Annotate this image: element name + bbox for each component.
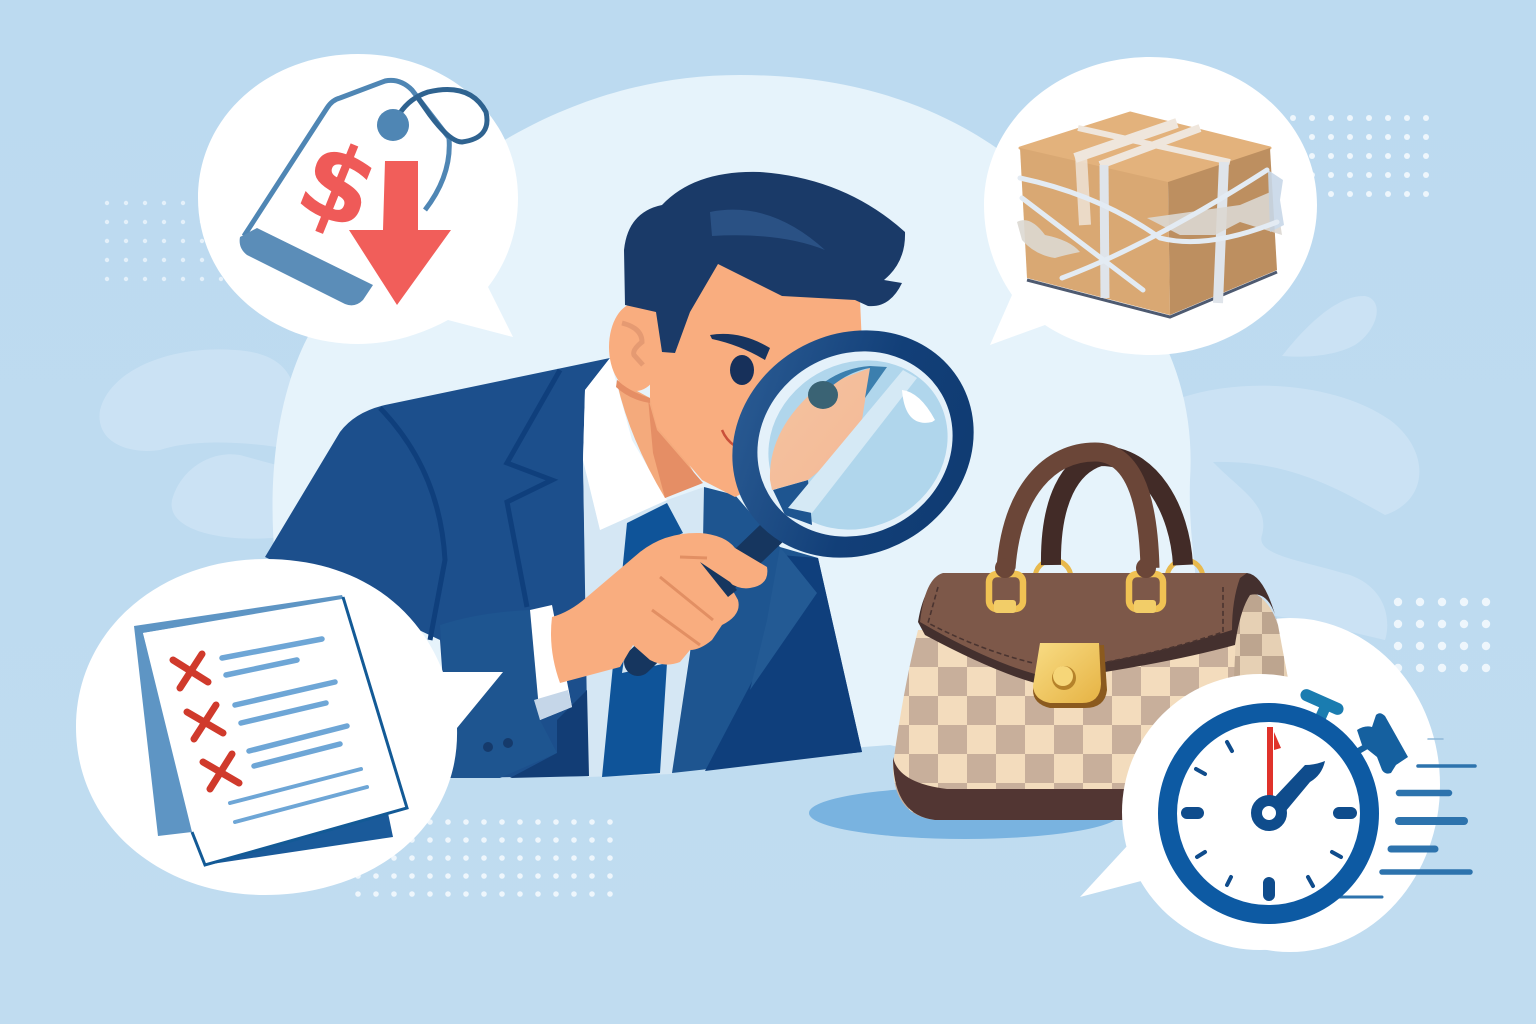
hair highlight — [710, 210, 825, 250]
collar — [583, 358, 667, 530]
flap — [920, 573, 1247, 674]
side button — [1357, 713, 1408, 774]
tag hole — [377, 109, 409, 141]
hand — [551, 533, 767, 683]
back sheet — [134, 595, 344, 836]
wrap strings — [1020, 170, 1277, 290]
body — [893, 623, 1295, 820]
handbag shadow — [809, 787, 1121, 839]
smile — [722, 430, 735, 446]
sleeve — [440, 610, 557, 778]
bubble tail — [1080, 845, 1190, 897]
box top — [1020, 113, 1270, 182]
side panel — [1232, 592, 1292, 720]
dot grids — [97, 108, 1497, 903]
bubble — [76, 559, 503, 895]
box right face — [1168, 148, 1277, 315]
jacket right side — [672, 487, 862, 773]
bubble — [984, 57, 1317, 355]
ear — [609, 303, 663, 391]
back rings — [1035, 560, 1203, 596]
shirt — [583, 460, 704, 777]
man in suit — [76, 54, 1475, 952]
background blobs: soft clouds — [99, 296, 1419, 640]
neck — [617, 380, 700, 498]
bottom sheet — [205, 813, 393, 865]
rivets — [995, 558, 1156, 578]
center pin — [1256, 800, 1282, 826]
face — [650, 262, 862, 497]
neck shadow — [648, 398, 703, 498]
sleeve button — [483, 738, 513, 752]
rim — [691, 287, 1015, 601]
red crosses — [173, 654, 239, 789]
speech bubble: price tag — [198, 54, 518, 344]
paper — [143, 599, 407, 865]
front handle — [1006, 452, 1150, 568]
buckles — [989, 574, 1163, 609]
stitching — [928, 587, 1223, 663]
jacket left side — [265, 358, 610, 778]
minor ticks — [1196, 742, 1341, 886]
hour ticks — [1187, 813, 1351, 895]
buckle bars — [994, 600, 1156, 613]
jacket seams — [380, 370, 560, 640]
speech bubble: damaged parcel — [984, 57, 1317, 355]
lens ring — [723, 316, 987, 572]
under sleeve — [510, 690, 589, 778]
text lines — [222, 639, 367, 822]
box bottom edge — [1027, 272, 1277, 317]
shirt cuff — [530, 605, 572, 720]
magnifying glass handle — [638, 530, 775, 662]
ear inner — [622, 323, 643, 365]
down arrow — [349, 161, 451, 305]
paper edges — [192, 597, 407, 865]
dollar sign: $ — [282, 115, 395, 255]
tag thick bottom — [240, 228, 373, 305]
side button stem — [1350, 743, 1372, 756]
clock face — [1168, 712, 1370, 914]
torn tape — [1017, 170, 1284, 258]
box left face — [1020, 148, 1170, 315]
speed lines — [1338, 739, 1475, 897]
jacket right shadow panel — [705, 555, 862, 771]
second hand — [1267, 727, 1281, 800]
jacket highlight — [750, 547, 817, 690]
tag string — [400, 90, 487, 142]
leather base — [893, 757, 1135, 820]
eyebrow — [710, 334, 770, 360]
minute hand — [1272, 761, 1325, 812]
tag outline — [244, 80, 449, 236]
bubble front — [1122, 674, 1398, 950]
flap edge — [918, 573, 1278, 683]
crown — [1299, 687, 1345, 725]
clasp — [1033, 643, 1107, 708]
handbag — [893, 452, 1295, 820]
jaw shadow — [616, 380, 650, 403]
bubble — [198, 54, 518, 344]
speech bubble: stopwatch back — [1140, 618, 1440, 952]
tie — [602, 503, 683, 777]
eye — [730, 355, 754, 385]
speech bubble: checklist — [76, 559, 503, 895]
speech bubble: stopwatch — [1080, 674, 1475, 950]
hair — [624, 172, 905, 353]
magnifying glass — [732, 330, 974, 558]
background blob: central glow — [273, 75, 1200, 800]
straps — [1075, 123, 1230, 303]
back handle — [1051, 456, 1183, 565]
lens contents — [768, 360, 948, 530]
